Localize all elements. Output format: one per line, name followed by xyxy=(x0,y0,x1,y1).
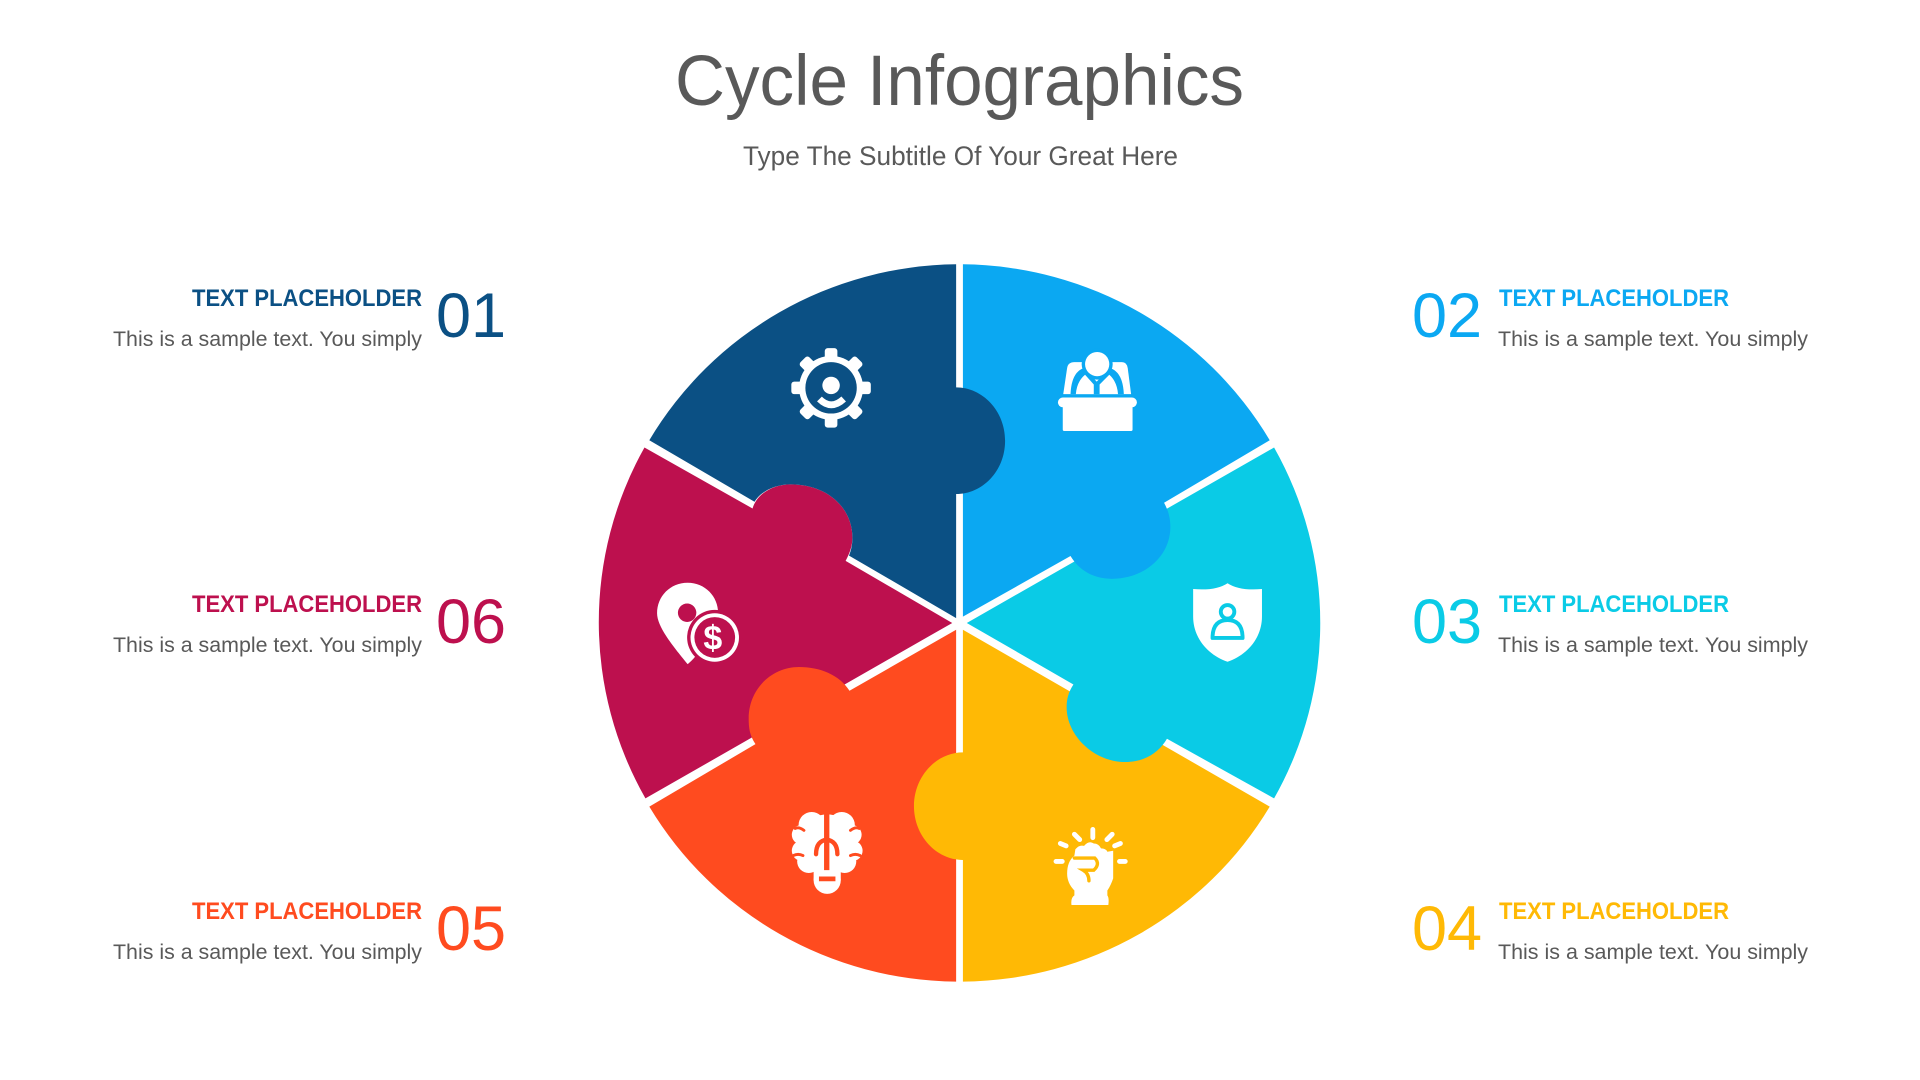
item 02: This is a sample text. You simply xyxy=(1498,328,1809,351)
item 04: TEXT PLACEHOLDER xyxy=(1499,898,1729,925)
item 06: TEXT PLACEHOLDER xyxy=(192,591,422,618)
item 03 xyxy=(1412,587,1809,657)
icon: location pin with dollar xyxy=(657,583,742,665)
item 03: This is a sample text. You simply xyxy=(1498,634,1809,657)
item 06: This is a sample text. You simply xyxy=(113,634,423,657)
title: Cycle Infographics xyxy=(675,42,1244,121)
item 02 xyxy=(1412,281,1809,351)
item 06: 06 xyxy=(436,587,506,657)
item 05: This is a sample text. You simply xyxy=(113,941,423,964)
item 01 xyxy=(113,281,506,351)
item 05: TEXT PLACEHOLDER xyxy=(192,898,422,925)
item 02: TEXT PLACEHOLDER xyxy=(1499,285,1729,312)
item 02: 02 xyxy=(1412,281,1482,351)
item 04 xyxy=(1412,894,1809,964)
item 05: 05 xyxy=(436,894,506,964)
icon: raised fist with rays xyxy=(1056,829,1125,905)
subtitle: Type The Subtitle Of Your Great Here xyxy=(743,141,1178,171)
cycle diagram xyxy=(599,264,1320,982)
icon: brain bulb xyxy=(792,812,863,894)
item 05 xyxy=(113,894,506,964)
icon: location pin with dollar: $ xyxy=(703,620,722,658)
item 01: TEXT PLACEHOLDER xyxy=(192,285,422,312)
item 04: This is a sample text. You simply xyxy=(1498,941,1809,964)
icon: speaker at lectern xyxy=(1058,349,1137,431)
segment 03 cyan xyxy=(967,447,1320,798)
item 01: 01 xyxy=(436,281,506,351)
item 03: 03 xyxy=(1412,587,1482,657)
item 01: This is a sample text. You simply xyxy=(113,328,423,351)
icon: gear with person xyxy=(791,348,871,428)
segment 05 orange xyxy=(649,630,956,982)
segment 02 blue xyxy=(963,264,1270,617)
icon: shield with person xyxy=(1193,583,1262,662)
item 04: 04 xyxy=(1412,894,1482,964)
item 03: TEXT PLACEHOLDER xyxy=(1499,591,1729,618)
segment 01 navy xyxy=(649,264,1005,618)
item 06 xyxy=(113,587,506,657)
segment 06 crimson xyxy=(599,447,952,798)
segment 04 yellow xyxy=(914,630,1270,982)
